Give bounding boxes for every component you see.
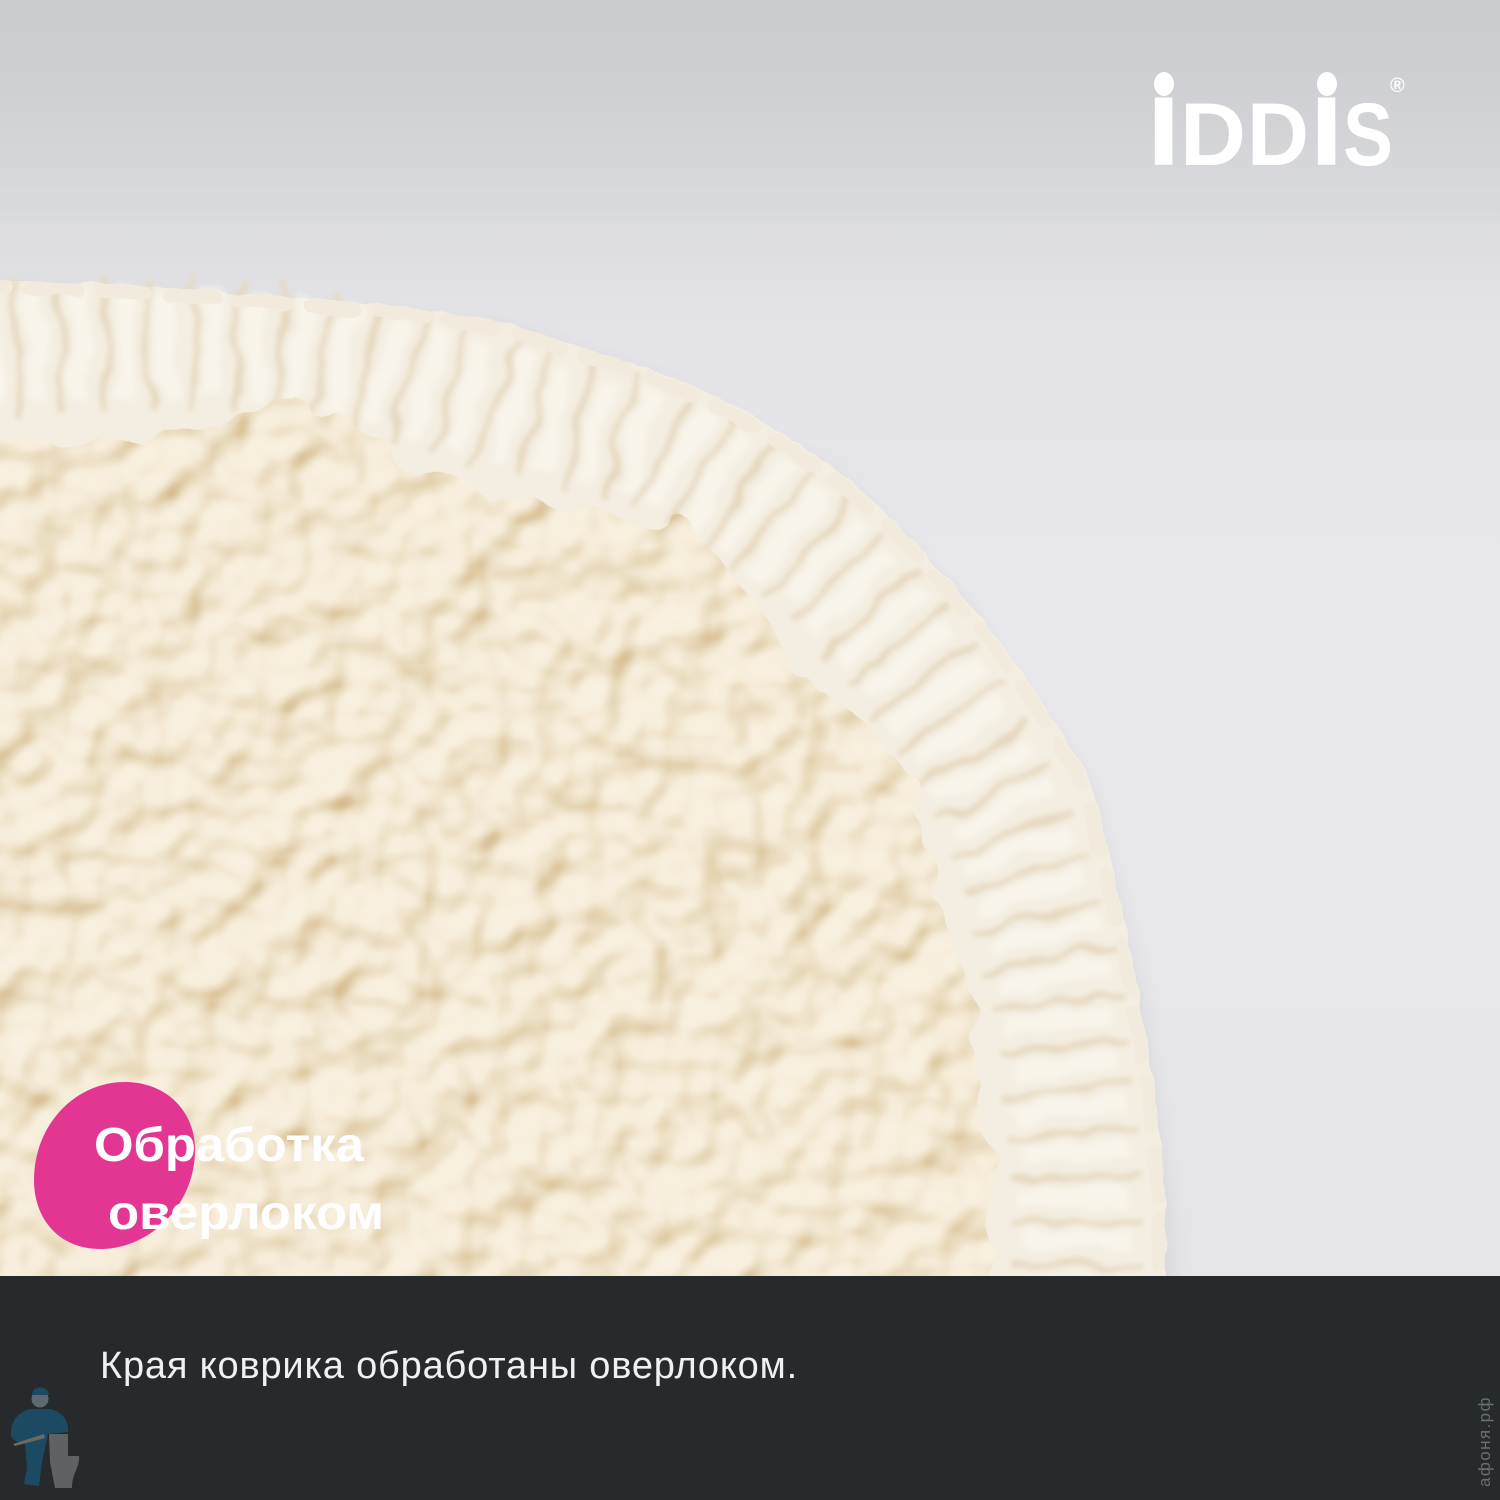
logo: iDDiS <box>1154 72 1404 166</box>
heading <box>94 1119 384 1240</box>
watermark: афоня.рф <box>1475 1396 1494 1487</box>
pink blob <box>34 1082 195 1249</box>
logo: iDDiS: i <box>1146 50 1181 192</box>
crochet edge <box>10 282 1118 951</box>
rug border <box>0 280 1166 1300</box>
logo: iDDiS: D <box>1180 84 1246 184</box>
border stitches <box>0 344 1076 1290</box>
fluffy pile <box>0 398 990 1300</box>
dark caption band <box>0 1276 1500 1500</box>
heading: оверлоком <box>108 1187 384 1240</box>
logo: iDDiS: S <box>1343 84 1393 184</box>
logo: iDDiS: ® <box>1390 75 1405 97</box>
logo: iDDiS: i <box>1309 50 1344 192</box>
heading: Обработка <box>94 1119 364 1172</box>
rug shadow <box>1129 948 1172 1276</box>
caption text: Края коврика обработаны оверлоком. <box>100 1345 798 1387</box>
icon: plumber with toilet <box>10 1388 79 1488</box>
logo: iDDiS: D <box>1247 84 1309 184</box>
